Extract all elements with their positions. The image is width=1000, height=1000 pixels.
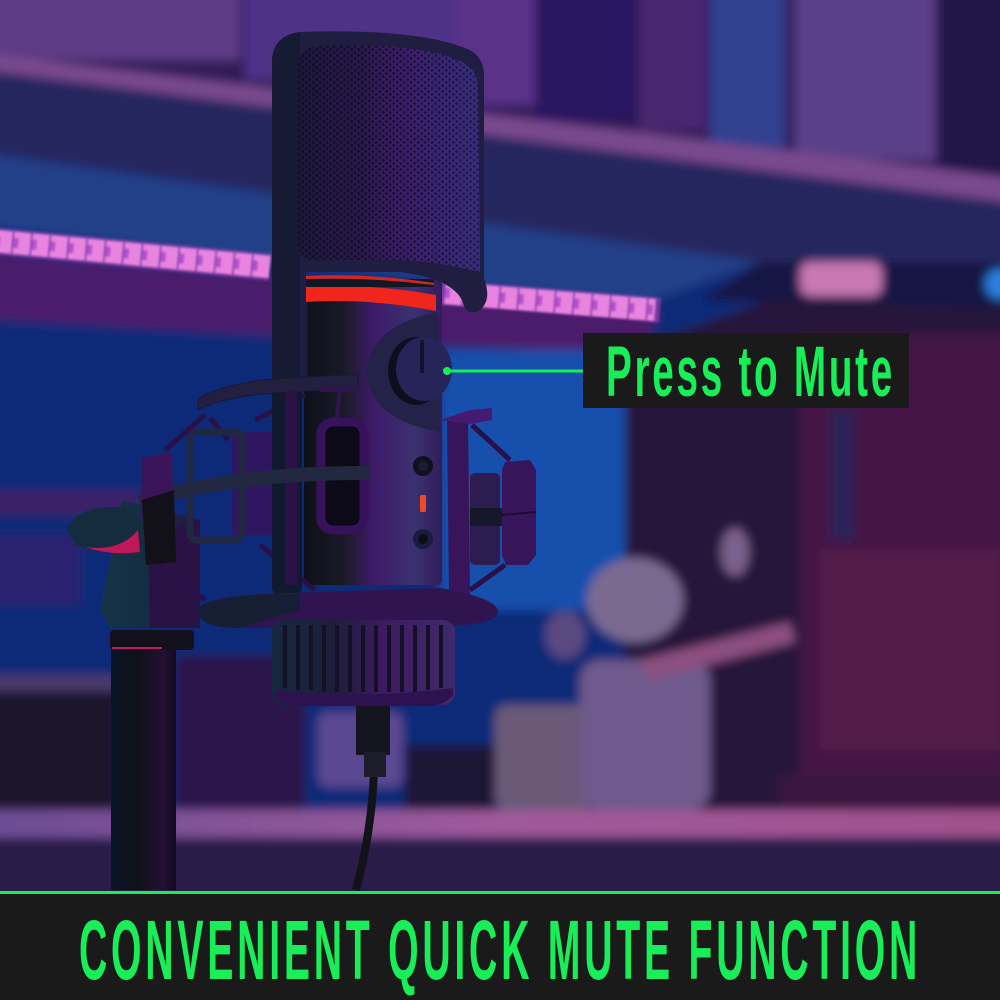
microphone stand <box>67 500 200 890</box>
LED strip <box>0 241 660 310</box>
upper shelf board <box>0 60 1000 270</box>
blurred figurine <box>495 705 595 810</box>
lower ledge under LED strip <box>0 252 660 356</box>
pop filter <box>272 31 487 378</box>
desk <box>0 838 1000 928</box>
mute knob housing <box>366 312 440 432</box>
wall patches <box>0 490 140 515</box>
threaded base ring <box>272 620 455 706</box>
shock mount <box>140 374 536 628</box>
callout: press to mute <box>443 333 909 412</box>
icon: mute knob <box>388 337 452 405</box>
body controls <box>413 456 433 476</box>
red light ring <box>305 286 436 311</box>
lamp and glow <box>800 262 882 296</box>
USB cable <box>356 700 390 890</box>
bottom left blurred objects <box>0 680 118 810</box>
top shelf backdrop <box>0 0 1000 185</box>
microphone body <box>272 275 452 585</box>
cabinet on the right <box>625 300 1000 810</box>
